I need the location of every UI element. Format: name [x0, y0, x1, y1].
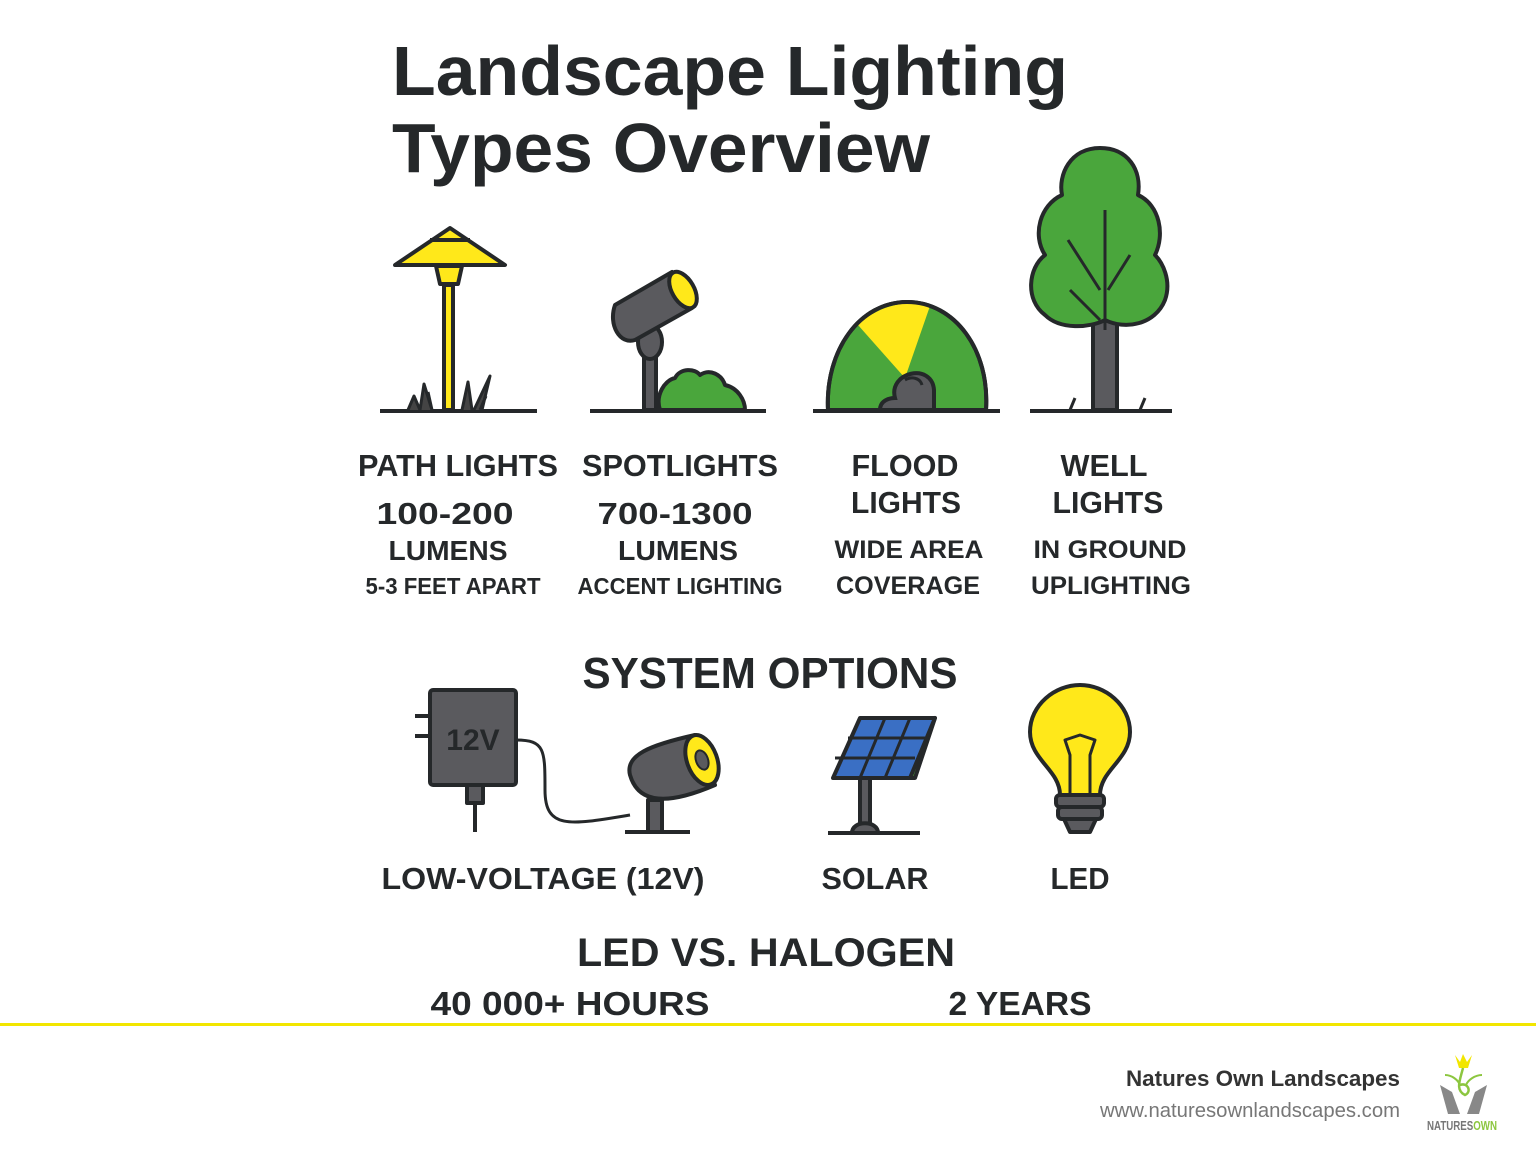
labels: system options: LED: [1050, 861, 1110, 896]
labels: flood lights: LIGHTS: [851, 485, 961, 520]
icon: low-voltage transformer and spotlight: [415, 690, 725, 832]
footer brand text: www.naturesownlandscapes.com: [1099, 1100, 1400, 1122]
labels: spotlights: [578, 448, 782, 599]
labels: well lights: WELL: [1060, 448, 1148, 483]
comparison values: 40 000+ HOURS: [430, 985, 710, 1022]
labels: system options: SOLAR: [822, 861, 928, 896]
heading: system options: SYSTEM OPTIONS: [582, 649, 958, 698]
labels: well lights: [1031, 448, 1191, 600]
labels: flood lights: COVERAGE: [836, 572, 980, 600]
comparison values: [430, 985, 1092, 1022]
labels: path lights: 100-200: [376, 496, 514, 531]
labels: path lights: [358, 448, 558, 599]
labels: path lights: LUMENS: [388, 535, 508, 566]
logo: NATURESOWN: [1427, 1118, 1497, 1133]
title: [392, 32, 1068, 187]
labels: spotlights: 700-1300: [598, 496, 752, 531]
icon: well light tree: [1030, 148, 1172, 411]
labels: spotlights: SPOTLIGHTS: [582, 448, 778, 483]
heading: LED vs halogen: LED VS. HALOGEN: [577, 931, 955, 975]
comparison values: 2 YEARS: [948, 985, 1092, 1022]
icon: LED bulb: [1030, 685, 1130, 832]
footer brand text: Natures Own Landscapes: [1126, 1066, 1400, 1091]
icon: path light: [380, 228, 537, 411]
icon: solar panel: [828, 718, 935, 833]
labels: spotlights: LUMENS: [618, 535, 738, 566]
labels: system options: [382, 861, 1110, 896]
title: Types Overview: [392, 109, 931, 187]
labels: system options: LOW-VOLTAGE (12V): [382, 861, 704, 896]
labels: well lights: LIGHTS: [1052, 485, 1164, 520]
labels: path lights: 5-3 FEET APART: [366, 573, 540, 599]
footer brand text: [1099, 1066, 1400, 1122]
labels: path lights: PATH LIGHTS: [358, 448, 558, 483]
labels: flood lights: WIDE AREA: [834, 536, 984, 564]
labels: well lights: UPLIGHTING: [1031, 572, 1191, 600]
title: Landscape Lighting: [392, 32, 1068, 110]
labels: flood lights: FLOOD: [852, 448, 958, 483]
icon: flood light: [813, 302, 1000, 411]
labels: well lights: IN GROUND: [1034, 536, 1186, 564]
icon: low-voltage transformer and spotlight: 12V: [446, 724, 500, 757]
logo: [1427, 1054, 1497, 1133]
labels: spotlights: ACCENT LIGHTING: [578, 573, 782, 599]
icon: spotlight: [590, 267, 766, 411]
labels: flood lights: [834, 448, 984, 600]
